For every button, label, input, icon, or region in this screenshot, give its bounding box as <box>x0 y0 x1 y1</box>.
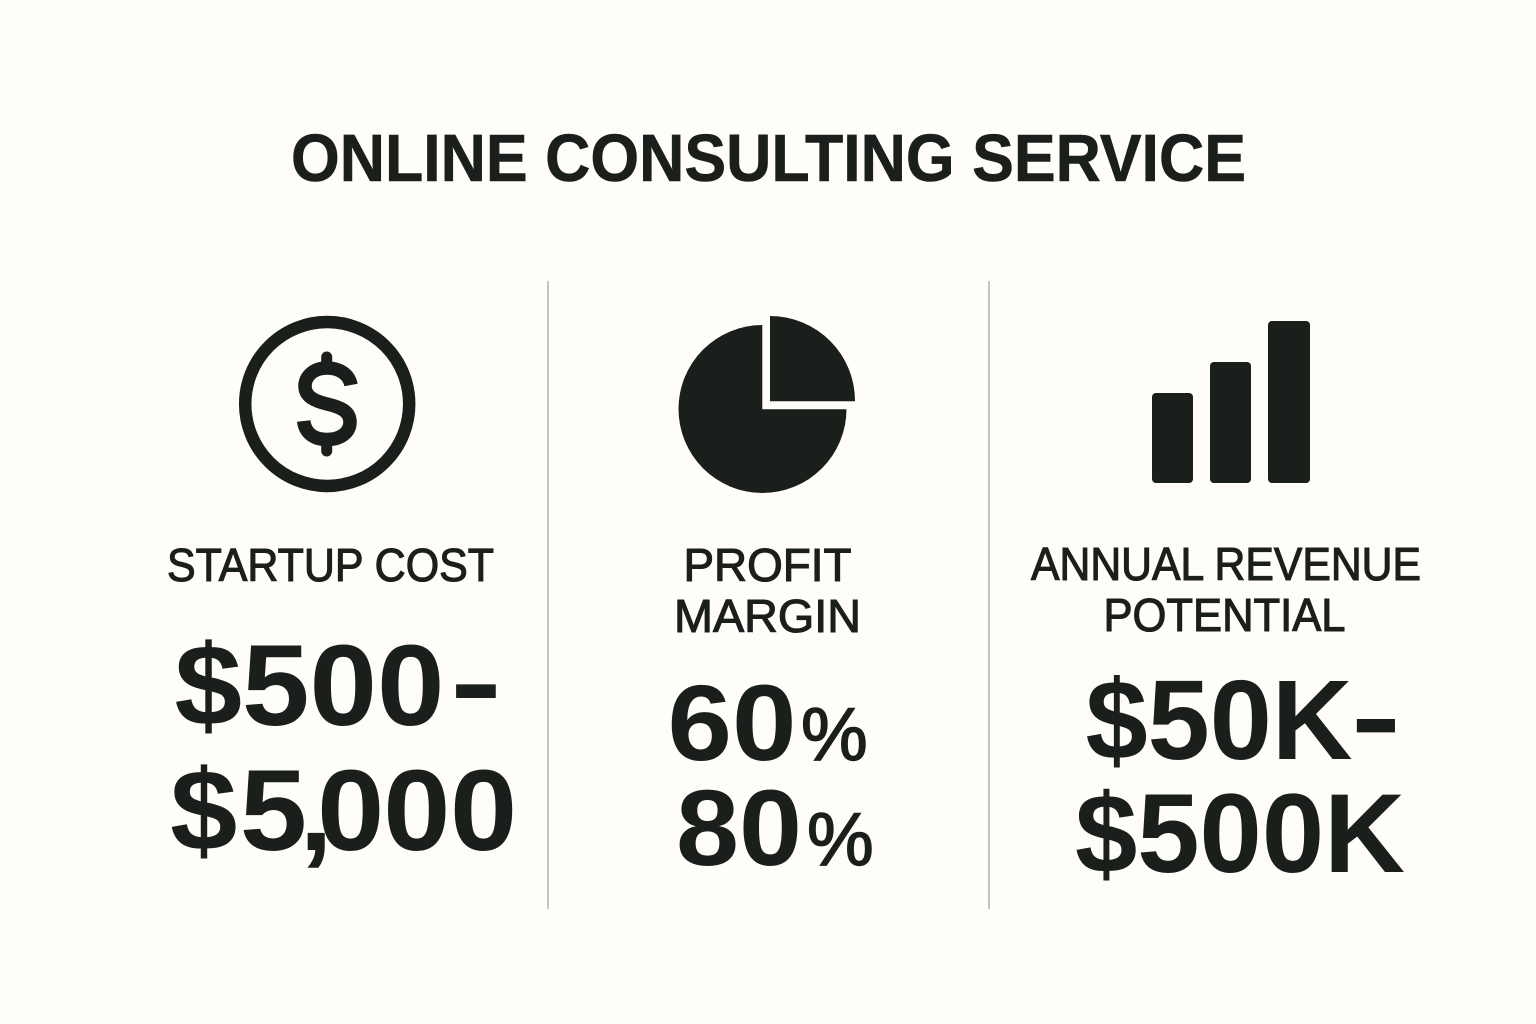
value: $5,000: $5,000 <box>170 746 517 874</box>
value: $500-: - <box>450 618 502 746</box>
label: startup cost: STARTUP COST <box>167 539 494 591</box>
icon: bar chart <box>1152 321 1310 483</box>
label: annual revenue potential <box>1031 538 1421 641</box>
label: profit margin <box>674 539 861 642</box>
panel: annual revenue potential <box>1031 321 1421 896</box>
value: 80%: 80 <box>676 767 802 888</box>
label: annual revenue potential: ANNUAL REVENUE <box>1031 538 1421 590</box>
value: $50K-: $50K <box>1086 657 1352 783</box>
value: 60%: % <box>801 692 868 776</box>
value: 80% <box>676 767 874 888</box>
title: ONLINE CONSULTING SERVICE <box>291 121 1246 196</box>
value: $500-: $500 <box>174 622 444 750</box>
label: profit margin: PROFIT <box>684 539 852 591</box>
value: $50K-: - <box>1351 653 1401 779</box>
icon: dollar coin <box>245 322 409 486</box>
value: 60%: 60 <box>668 662 796 783</box>
value: 80%: % <box>807 797 874 881</box>
value: 60% <box>668 662 868 783</box>
label: profit margin: MARGIN <box>674 590 861 642</box>
icon: pie chart <box>679 316 855 493</box>
panel: profit margin <box>668 316 874 888</box>
label: annual revenue potential: POTENTIAL <box>1104 589 1346 641</box>
value: $500K: $500K <box>1075 771 1405 896</box>
panel: startup cost <box>167 322 517 874</box>
